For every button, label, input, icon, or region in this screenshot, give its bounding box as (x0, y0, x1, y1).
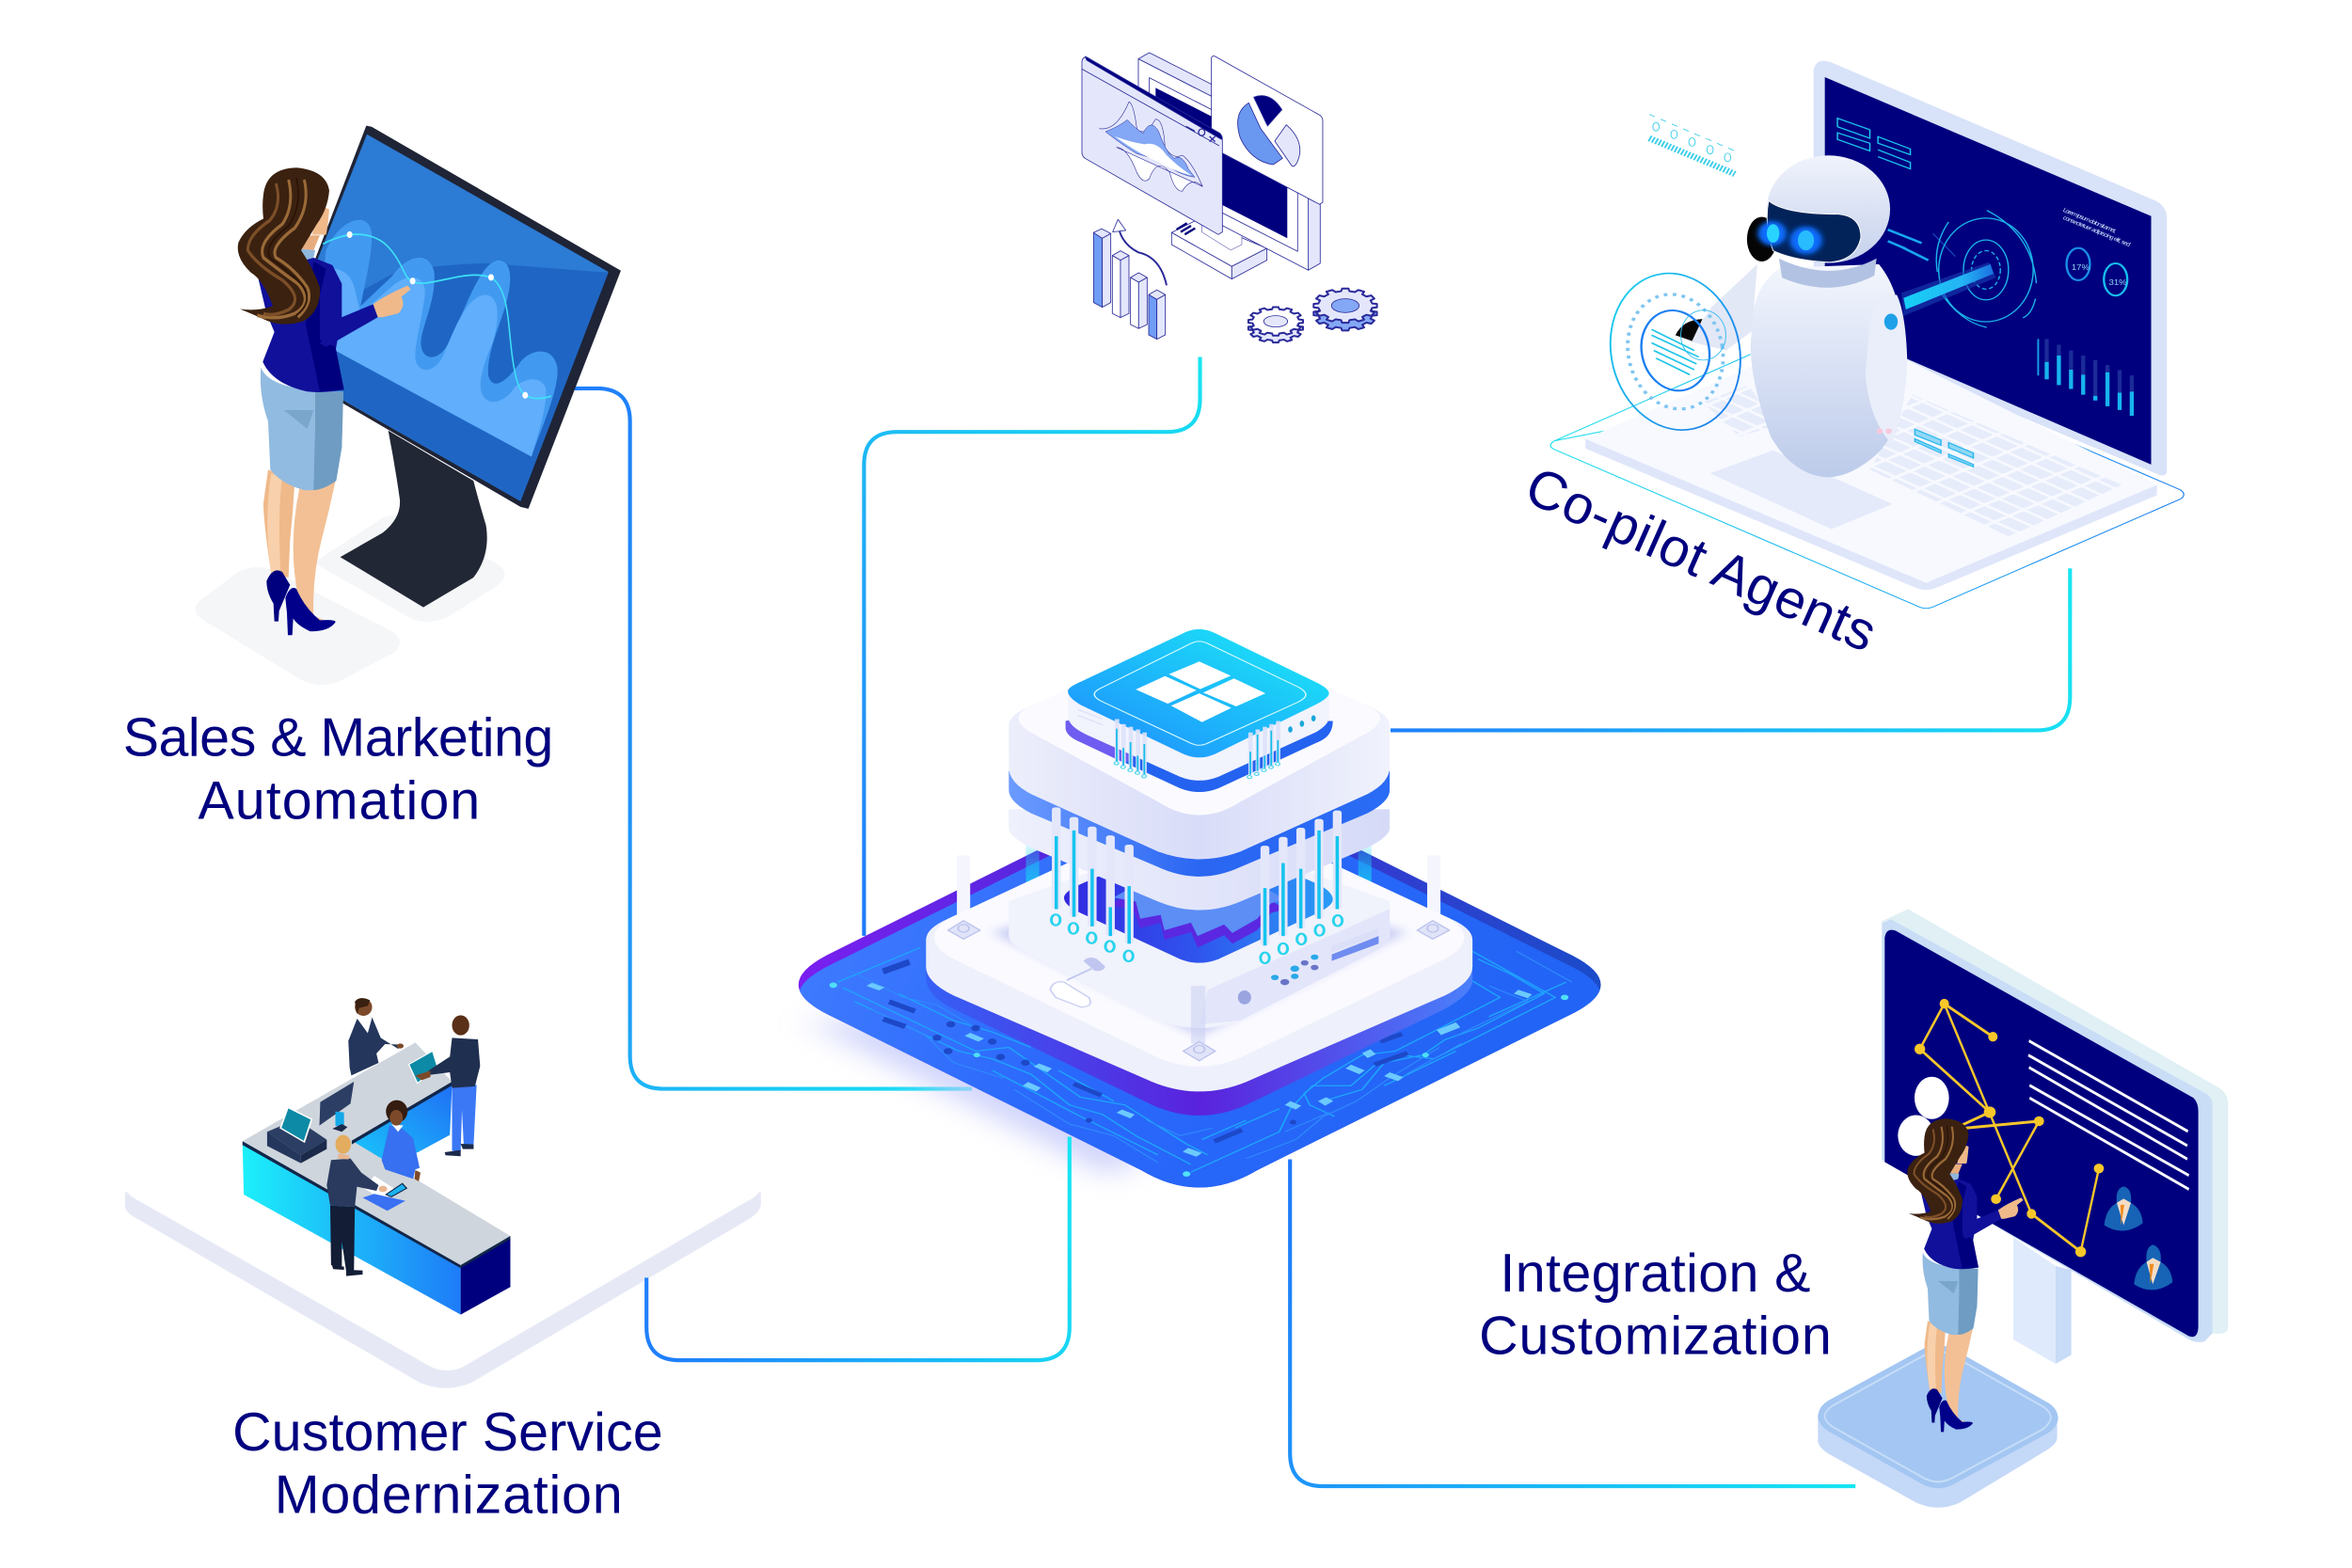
screen caption: consectetuer adipiscing elit, sed (2061, 215, 2132, 248)
upper tier lower section (1009, 809, 1390, 911)
customer in blue trousers (415, 1015, 480, 1156)
label: Customer Service Modernization (232, 1402, 663, 1526)
gear window (1064, 832, 1333, 963)
laptop deck (1585, 324, 2157, 590)
circuit traces (837, 947, 1572, 1172)
right panel controls (1238, 928, 1378, 1005)
counter equipment (267, 1051, 437, 1211)
illustration: Customer Service desk (125, 998, 761, 1388)
label: Sales & Marketing Automation (123, 708, 553, 832)
label: Integration & Customization: Integration & (1500, 1243, 1810, 1304)
small connector rods (1114, 719, 1280, 779)
line chart window (1082, 56, 1222, 234)
staff member in blue sweater (382, 1101, 421, 1181)
label: Sales & Marketing Automation: Sales & Marketing (123, 708, 553, 768)
gears (1108, 855, 1285, 947)
network graph (1915, 999, 2104, 1257)
touch screen monitor (275, 126, 621, 509)
gears (1248, 289, 1377, 342)
connector: central hub to analytics (864, 356, 1200, 936)
large connector rods (1051, 807, 1343, 963)
screen caption: Lorem ipsum dolor sit amet, (2061, 207, 2118, 234)
customer with phone (326, 1135, 388, 1276)
robot beam backing (1901, 262, 1995, 316)
pale corner rods (957, 855, 1440, 925)
label: Co-pilot Agents: Co-pilot Agents (1517, 456, 1885, 664)
upper tier white plate (1009, 633, 1390, 859)
avatar: person one (2105, 1186, 2143, 1231)
connector: central hub to Co-pilot Agents (1391, 568, 2070, 730)
floating mini chart (1649, 115, 1735, 174)
board stand (2013, 1238, 2072, 1364)
connector: central hub to Integration (1290, 1159, 1855, 1486)
illustration: Integration woman at display board (1818, 910, 2228, 1508)
bar chart with growth arrow (1093, 219, 1167, 340)
illustration: analytics dashboard (1082, 53, 1377, 342)
connector: central hub to Customer Service (646, 1137, 1070, 1360)
robot beam core (1903, 264, 1994, 309)
connector: central hub to Sales and Marketing (573, 388, 972, 1089)
donut stats (2067, 248, 2127, 295)
service counter (243, 1042, 510, 1315)
screw knobs (948, 921, 1449, 1061)
stat numbers (2072, 263, 2127, 287)
illustration: Sales and Marketing woman at touch screen (195, 126, 621, 685)
woman pointing at board (1907, 1118, 2024, 1432)
left plug (1050, 958, 1105, 1007)
staff member with glasses (348, 998, 404, 1075)
holographic rings (1598, 266, 1752, 437)
kiosk stand (341, 431, 487, 608)
circuit chips (866, 983, 1533, 1157)
text lines on board (2028, 1041, 2189, 1189)
screen bar chart (2038, 339, 2132, 416)
illustration: central hub (799, 629, 1601, 1199)
middle body (1009, 832, 1390, 1043)
upper tier blue band (1009, 771, 1390, 877)
pedestal (1818, 1345, 2058, 1508)
Windows chip (1066, 629, 1333, 792)
laptop screen (1814, 61, 2167, 476)
target rings (1936, 211, 2037, 327)
circuit board plate (798, 850, 1601, 1187)
hub drop shadow (804, 1021, 1147, 1178)
cyan tubes behind hub (1025, 832, 1372, 901)
illustration: Co-pilot robot on laptop (1550, 61, 2184, 609)
lower white tier (926, 801, 1472, 1116)
label: Integration & Customization (1479, 1243, 1832, 1367)
monitor with navy screen (1138, 53, 1320, 270)
white shapes on board (1898, 1077, 1949, 1156)
pie chart panel (1212, 56, 1323, 204)
woman figure (238, 167, 411, 635)
circuit pads (882, 959, 1409, 1144)
robot (1676, 155, 1907, 477)
avatar: person two (2134, 1244, 2172, 1290)
circuit end nodes (830, 982, 1568, 1177)
gear highlight (1114, 847, 1285, 936)
label: Sales & Marketing Automation: Automation (198, 771, 480, 832)
floor plate (125, 1166, 761, 1388)
stat numbers: 31% (2109, 278, 2127, 287)
Windows logo (1136, 661, 1265, 722)
label: Customer Service Modernization: Customer Service (232, 1402, 663, 1463)
display board (1882, 910, 2228, 1342)
label: Customer Service Modernization: Modernization (275, 1465, 623, 1526)
screen widgets (1837, 119, 1955, 261)
stat numbers: 17% (2072, 263, 2090, 272)
monitor stand (1171, 216, 1267, 279)
laptop base outline (1550, 355, 2184, 609)
floor shadows (195, 515, 505, 685)
label: Integration & Customization: Customization (1479, 1307, 1832, 1367)
